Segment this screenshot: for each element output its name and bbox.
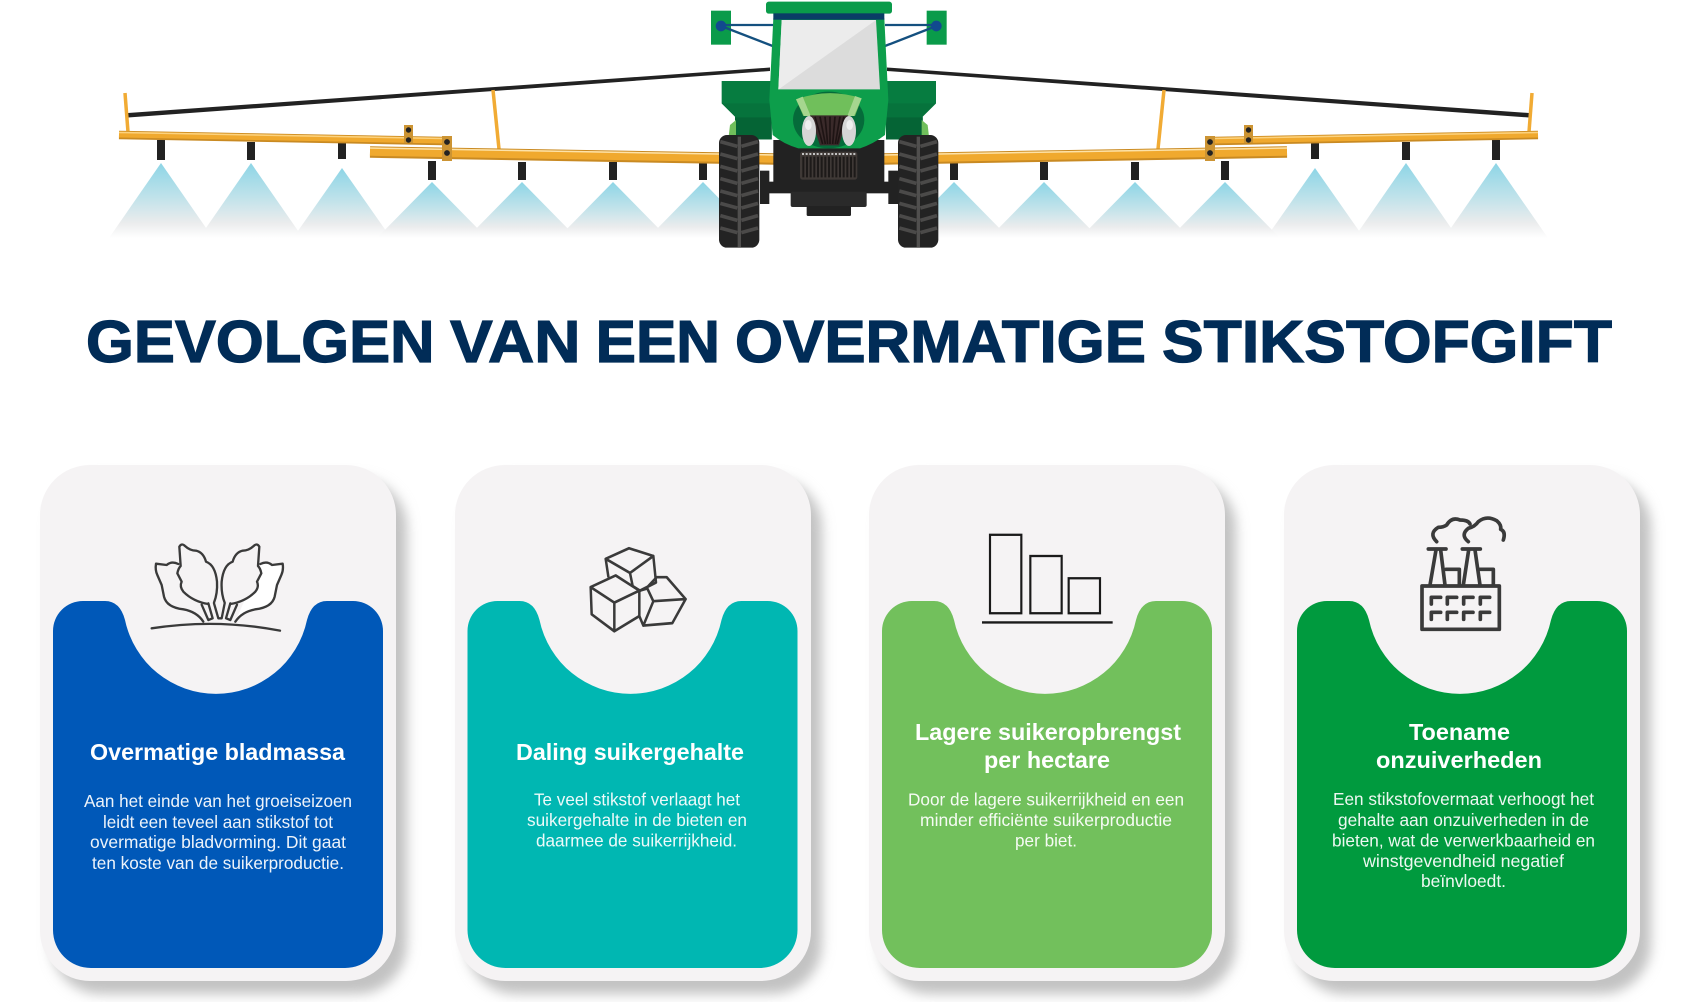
card body text: suikergehalte in de bieten en [527, 810, 747, 830]
title [86, 309, 1612, 375]
icon: sugar beet leaves [152, 544, 283, 631]
nozzles right [950, 140, 1500, 180]
card body text: per biet. [1015, 830, 1077, 850]
title: GEVOLGEN [86, 309, 435, 375]
roof [766, 2, 892, 20]
card heading: Overmatige bladmassa [90, 739, 345, 765]
card heading: onzuiverheden [1376, 747, 1542, 773]
panel: toename onzuiverheden [1284, 465, 1651, 994]
card body text [1332, 789, 1595, 891]
panel: overmatige bladmassa [40, 465, 407, 994]
right spray boom (mirrored) [882, 68, 1548, 238]
title: EEN [596, 309, 720, 375]
illustration: tractor with spray booms [109, 2, 1548, 248]
coloured panel with notch [882, 601, 1212, 968]
support wire left [128, 68, 770, 118]
panel: daling suikergehalte [455, 465, 822, 994]
card body text: gehalte aan onzuiverheden in de [1338, 810, 1589, 830]
card heading [1376, 719, 1542, 773]
coloured panel with notch [468, 601, 798, 968]
left wheel [719, 135, 759, 248]
boom connectors left [404, 125, 452, 161]
card body text: minder efficiënte suikerproductie [920, 810, 1172, 830]
lower chassis [760, 140, 898, 216]
title: VAN [450, 309, 580, 375]
card heading: Toename [1409, 719, 1510, 745]
card body text: winstgevendheid negatief [1362, 851, 1564, 871]
lower boom right [882, 148, 1287, 159]
card heading [915, 719, 1181, 773]
cab body [769, 18, 888, 148]
spray cones right [899, 163, 1548, 238]
tractor nose [793, 92, 864, 148]
card shadow [1295, 478, 1651, 994]
card body text: bieten, wat de verwerkbaarheid en [1332, 830, 1595, 850]
upper boom left [119, 132, 443, 141]
mirrors [711, 11, 947, 46]
card body text: ten koste van de suikerproductie. [92, 853, 344, 873]
posts left [125, 90, 499, 149]
card background [455, 465, 811, 981]
card shadow [51, 478, 407, 994]
card body text: Aan het einde van het groeiseizoen [84, 791, 352, 811]
card body text: Een stikstofovermaat verhoogt het [1333, 789, 1594, 809]
title: OVERMATIGE [735, 309, 1146, 375]
card body text [84, 791, 352, 873]
card body text: Door de lagere suikerrijkheid en een [908, 790, 1184, 810]
card body text: beïnvloedt. [1421, 871, 1506, 891]
card shadow [880, 478, 1236, 994]
title: STIKSTOFGIFT [1162, 309, 1612, 375]
card body text [908, 790, 1184, 850]
card background [1284, 465, 1640, 981]
boom connectors right [1205, 125, 1253, 161]
card body text: daarmee de suikerrijkheid. [536, 830, 737, 850]
panel: lagere suikeropbrengst [869, 465, 1236, 994]
upper boom right [1214, 132, 1538, 141]
card heading: Daling suikergehalte [516, 739, 744, 765]
card background [40, 465, 396, 981]
front grille [800, 152, 857, 180]
left spray boom [109, 68, 775, 238]
card heading: per hectare [984, 747, 1110, 773]
card body text [527, 790, 747, 850]
icon: factory [1422, 518, 1504, 629]
card body text: leidt een teveel aan stikstof tot [103, 812, 333, 832]
card background [869, 465, 1225, 981]
tractor [711, 2, 947, 248]
hopper tanks [722, 81, 936, 139]
coloured panel with notch [53, 601, 383, 968]
spray cones left [109, 163, 758, 238]
card body text: Te veel stikstof verlaagt het [534, 790, 740, 810]
coloured panel with notch [1297, 601, 1627, 968]
card heading: Lagere suikeropbrengst [915, 719, 1181, 745]
nozzles left [157, 140, 707, 180]
posts right [1158, 90, 1532, 149]
support wire right [887, 68, 1529, 118]
card shadow [466, 478, 822, 994]
right wheel [898, 135, 938, 248]
windscreen [778, 20, 880, 89]
card body text: overmatige bladvorming. Dit gaat [90, 832, 346, 852]
lower boom left [370, 148, 775, 159]
icon: declining bar chart [982, 535, 1113, 622]
icon: sugar cubes [591, 548, 686, 631]
